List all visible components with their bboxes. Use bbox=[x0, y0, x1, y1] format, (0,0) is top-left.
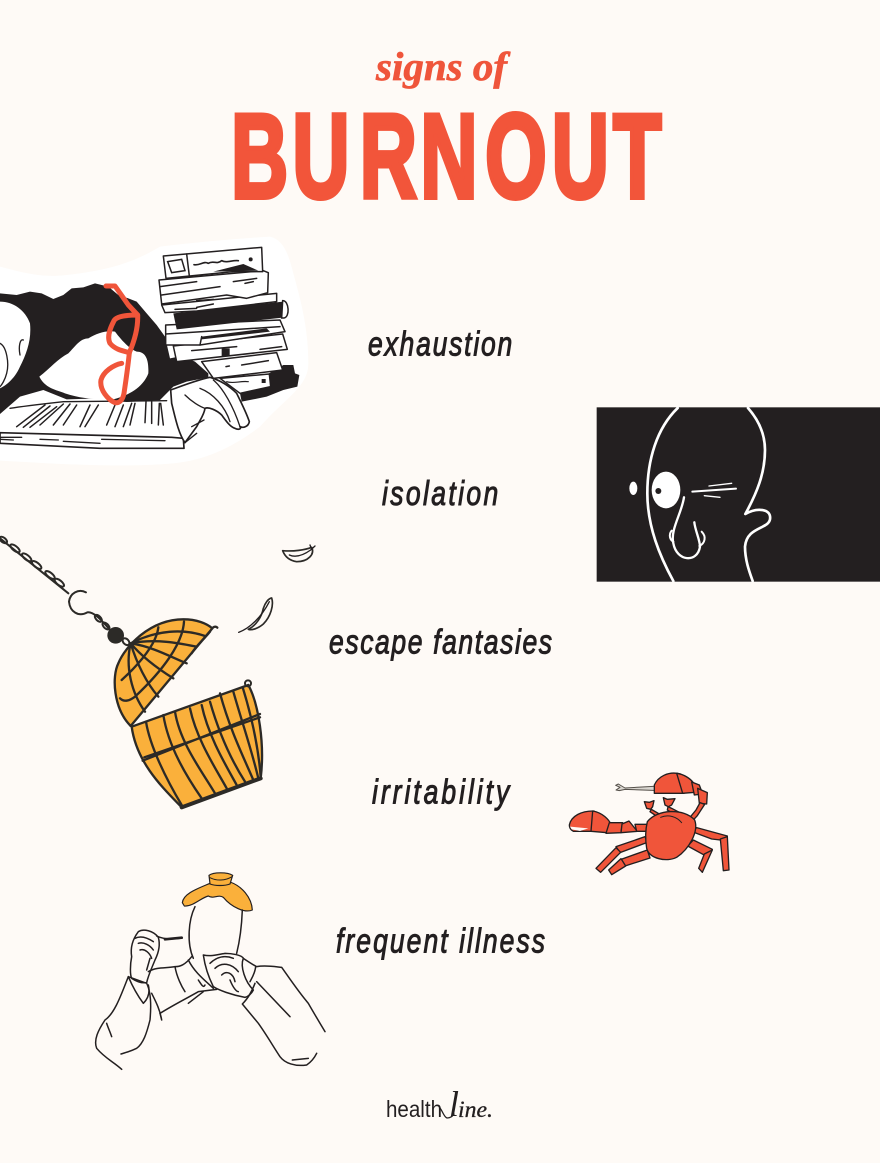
left sleeve bbox=[96, 977, 151, 1069]
illustration: person asleep on a book with stack of books bbox=[0, 237, 308, 465]
tweezers bbox=[616, 784, 660, 791]
illustration: sick person with ice bag and thermometer bbox=[96, 873, 325, 1069]
hair bbox=[0, 283, 208, 414]
body bbox=[646, 812, 696, 860]
face bbox=[39, 331, 148, 399]
left claw and arm bbox=[569, 811, 594, 831]
subtitle: signs of: signs of bbox=[375, 44, 511, 89]
label: frequent illness: frequent illness bbox=[336, 922, 545, 960]
heading: BURNOUT: BURNOUT bbox=[231, 89, 662, 223]
left hand with thermometer bbox=[130, 930, 159, 983]
label: irritability: irritability bbox=[372, 773, 511, 811]
top claw and arm bbox=[654, 773, 684, 793]
logo: healthline: l bbox=[449, 1084, 459, 1124]
logo: healthline: ine. bbox=[458, 1097, 493, 1122]
shoulders and collar bbox=[148, 957, 217, 1013]
book 1 bbox=[220, 374, 271, 393]
cage lid bbox=[115, 619, 212, 726]
illustration: open birdcage on chain with feathers bbox=[0, 535, 315, 807]
ice bag bbox=[182, 882, 252, 911]
sheets under the face bbox=[10, 401, 167, 408]
book 4 bbox=[166, 320, 285, 345]
book 7 bbox=[159, 271, 268, 304]
eye stalks bbox=[644, 801, 654, 809]
illustration: angry red crab with tweezers bbox=[569, 773, 729, 875]
feather 1 bbox=[283, 547, 313, 562]
book 3 bbox=[173, 334, 287, 362]
book 6 bbox=[162, 293, 277, 313]
label: exhaustion: exhaustion bbox=[368, 325, 512, 363]
label: isolation: isolation bbox=[382, 475, 498, 513]
hand holding pencil bbox=[171, 377, 249, 443]
top book bbox=[163, 247, 263, 278]
logo: healthline: health bbox=[386, 1096, 442, 1122]
black book bbox=[173, 302, 285, 329]
red glasses bbox=[101, 286, 138, 403]
label: escape fantasies: escape fantasies bbox=[329, 623, 552, 661]
cage base bbox=[132, 685, 262, 807]
lower legs bbox=[616, 837, 647, 853]
title bbox=[231, 44, 662, 223]
stack of books: bottom black bbox=[240, 365, 299, 402]
logo: healthline bbox=[386, 1084, 493, 1124]
outlines of face, shirt and arms bbox=[96, 907, 325, 1069]
book 2 bbox=[202, 353, 283, 378]
panel: black panel with head profile bbox=[597, 407, 880, 582]
right sleeve bbox=[242, 983, 317, 1065]
head outline bbox=[647, 408, 770, 581]
chain and hook bbox=[0, 535, 131, 646]
eye bbox=[652, 472, 680, 508]
open book edge bbox=[0, 433, 184, 448]
second eye dot bbox=[629, 482, 637, 495]
right hand on nose bbox=[203, 953, 253, 997]
bald head and ear bbox=[0, 302, 30, 388]
feather 2 bbox=[248, 598, 272, 630]
